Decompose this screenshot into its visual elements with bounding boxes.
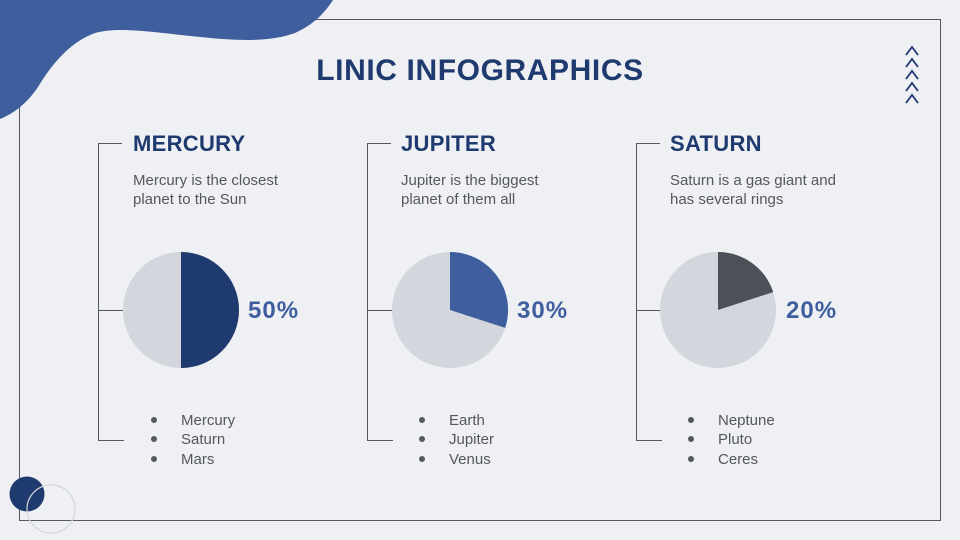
panel: mercury: Mercury is the closest [133,172,279,189]
panel: mercury: 50% [248,297,299,324]
panel: saturn: has several rings [670,191,783,208]
panel: saturn: Neptune [718,412,775,429]
panel: jupiter: Venus [449,451,491,468]
blob: top-left decoration [0,0,333,119]
panel: mercury: Mercury [181,412,236,429]
panel: mercury [98,131,299,468]
panel: mercury: planet to the Sun [133,191,246,208]
panel: mercury: Saturn [181,431,225,448]
panel: jupiter [368,131,568,468]
panel: mercury: MERCURY [133,131,246,156]
panel: jupiter: JUPITER [401,131,496,156]
icon: chevrons [906,47,918,103]
panel: jupiter: planet of them all [401,191,515,208]
panel: jupiter: Jupiter [449,431,494,448]
panel: saturn: Saturn is a gas giant and [670,172,836,189]
panel: saturn: Pluto [718,431,752,448]
panel: jupiter: 30% [517,297,568,324]
panel: mercury: Mars [181,451,214,468]
panel: saturn: SATURN [670,131,762,156]
panel: jupiter: Earth [449,412,485,429]
panel: jupiter: Jupiter is the biggest [401,172,539,189]
panel: saturn: Ceres [718,451,758,468]
panel: saturn [636,131,837,468]
title: LINIC INFOGRAPHICS [316,54,644,87]
icon: circles bottom-left [10,476,75,533]
panel: saturn: 20% [786,297,837,324]
